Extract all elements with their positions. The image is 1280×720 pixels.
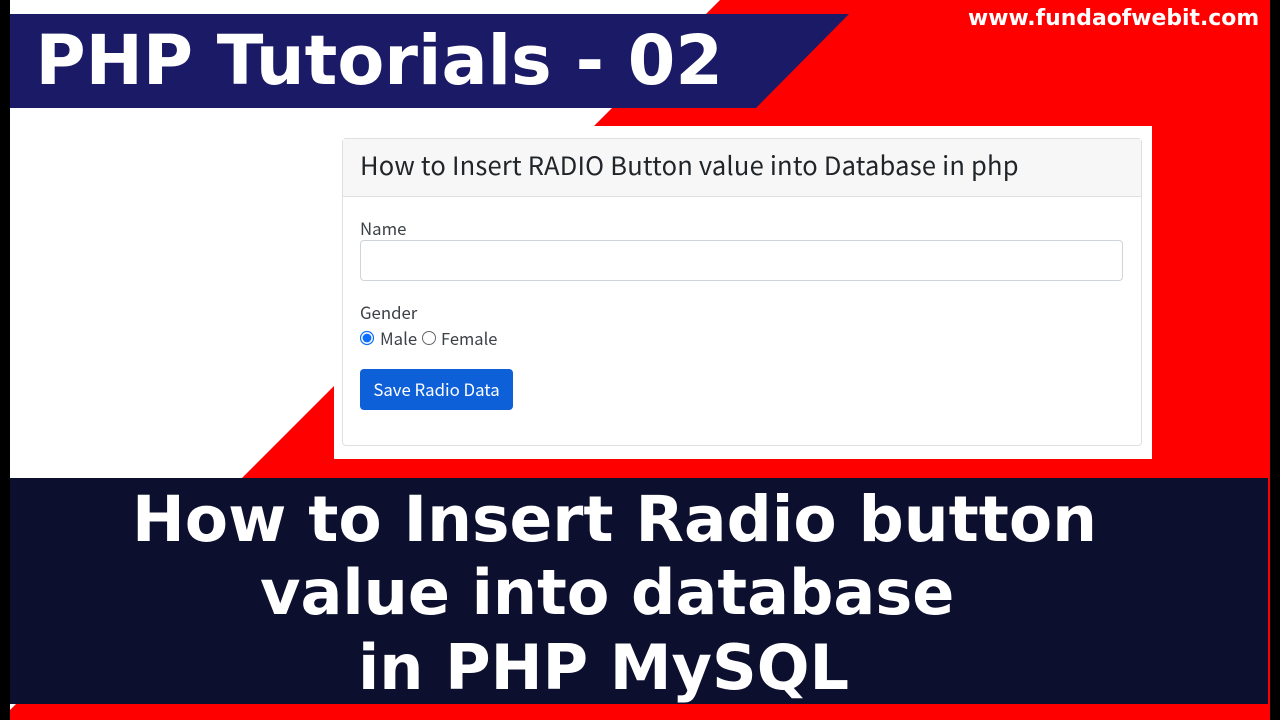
radio female <box>422 331 436 345</box>
female label: Female <box>441 326 497 350</box>
headline line 2: value into database <box>260 556 954 629</box>
screenshot panel: form <box>334 126 1152 459</box>
website url: www.fundaofwebit.com <box>968 6 1259 31</box>
bottom headline <box>132 482 1097 704</box>
name label: Name <box>360 216 406 240</box>
gender label: Gender <box>360 300 417 324</box>
form card <box>342 138 1142 446</box>
save button: Save Radio Data <box>373 377 500 401</box>
radio male <box>360 330 374 346</box>
male label: Male <box>380 326 417 350</box>
card header: How to Insert RADIO Button value into Database in php <box>360 146 1019 183</box>
name input <box>360 240 1123 281</box>
headline line 3: in PHP MySQL <box>358 631 849 704</box>
top title: PHP Tutorials - 02 <box>36 22 723 101</box>
headline line 1: How to Insert Radio button <box>132 482 1097 556</box>
save button <box>360 369 513 410</box>
card header <box>343 139 1141 197</box>
